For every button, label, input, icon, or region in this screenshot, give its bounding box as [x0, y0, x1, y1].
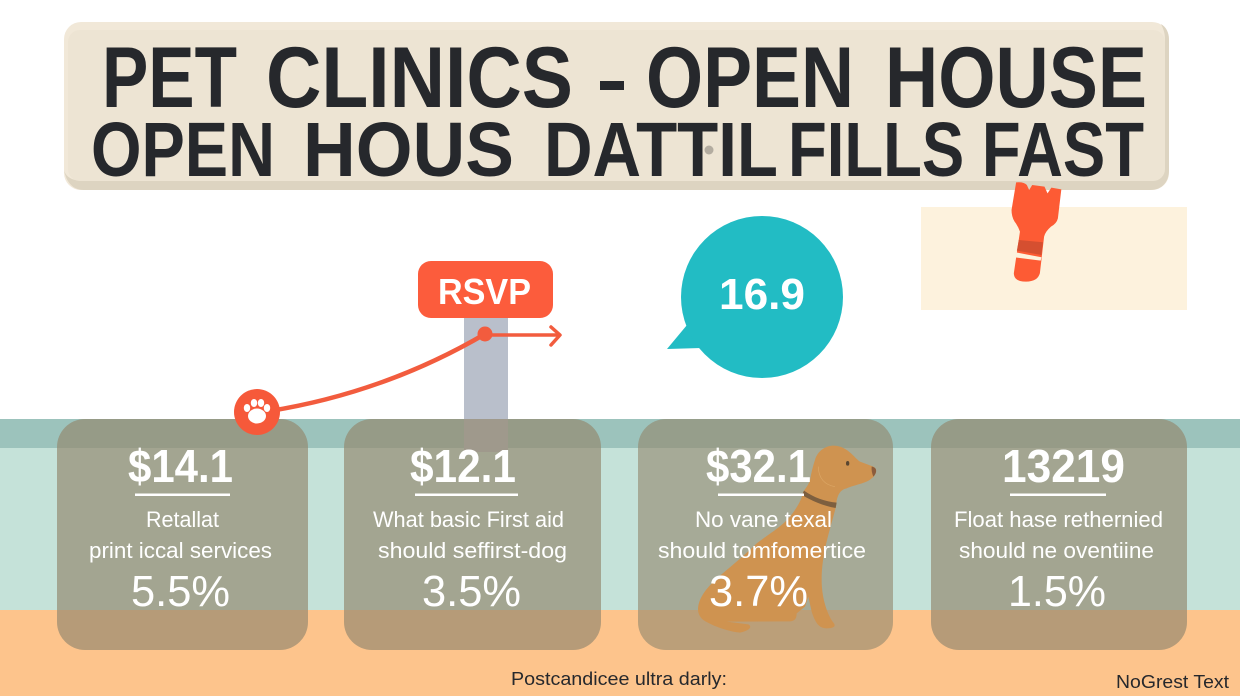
- card 1: print iccal services: [89, 538, 272, 563]
- arrow: route from paw to RSVP: [270, 326, 560, 411]
- background: clinic wall and floor: [0, 419, 1240, 696]
- RSVP sign: [418, 261, 553, 318]
- footer caption: Postcandicee ultra darly:: [511, 669, 727, 689]
- card 2: $12.1: [410, 440, 516, 492]
- card 3: $32.1: [706, 440, 811, 492]
- card 1: [57, 419, 308, 650]
- card 2: should seffirst-dog: [378, 538, 567, 563]
- card 4: [931, 419, 1187, 650]
- card 1: 5.5%: [131, 567, 230, 616]
- card 4: should ne oventiine: [959, 538, 1154, 563]
- title line 2: FILLS FAST: [788, 107, 1144, 193]
- card 1: $14.1: [128, 440, 233, 492]
- card 2: What basic First aid: [373, 507, 564, 532]
- title line 1: [102, 30, 1147, 126]
- cream note panel: [921, 207, 1187, 310]
- title line 1: HOUSE: [885, 30, 1147, 126]
- title banner: [64, 22, 1169, 193]
- card 3: 3.7%: [709, 567, 808, 616]
- card 4: 1.5%: [1008, 567, 1106, 616]
- dog illustration: [698, 446, 876, 633]
- bubble value: 16.9: [719, 270, 805, 319]
- title line 2: DATTIL: [544, 107, 778, 193]
- RSVP sign post: [464, 310, 508, 452]
- icon: orange brush: [1012, 182, 1061, 282]
- title line 1: CLINICS: [266, 30, 573, 126]
- card 1: Retallat: [146, 507, 220, 532]
- card 3: No vane texal: [695, 507, 832, 532]
- card 3: should tomfomertice: [658, 538, 866, 563]
- card 2: [344, 419, 601, 650]
- card 3: [638, 419, 893, 650]
- title line 1: PET: [102, 30, 237, 126]
- card 2: 3.5%: [422, 567, 521, 616]
- title line 1: OPEN: [646, 30, 854, 126]
- card 4: 13219: [1002, 440, 1125, 492]
- title line 2: OPEN: [91, 107, 275, 193]
- RSVP sign: RSVP: [438, 271, 531, 312]
- title line 2: [91, 107, 1144, 193]
- speech bubble: [667, 216, 843, 378]
- title line 2: HOUS: [303, 107, 514, 193]
- icon: paw badge: [234, 389, 280, 435]
- footer note: NoGrest Text: [1116, 672, 1229, 692]
- card 4: Float hase rethernied: [954, 507, 1163, 532]
